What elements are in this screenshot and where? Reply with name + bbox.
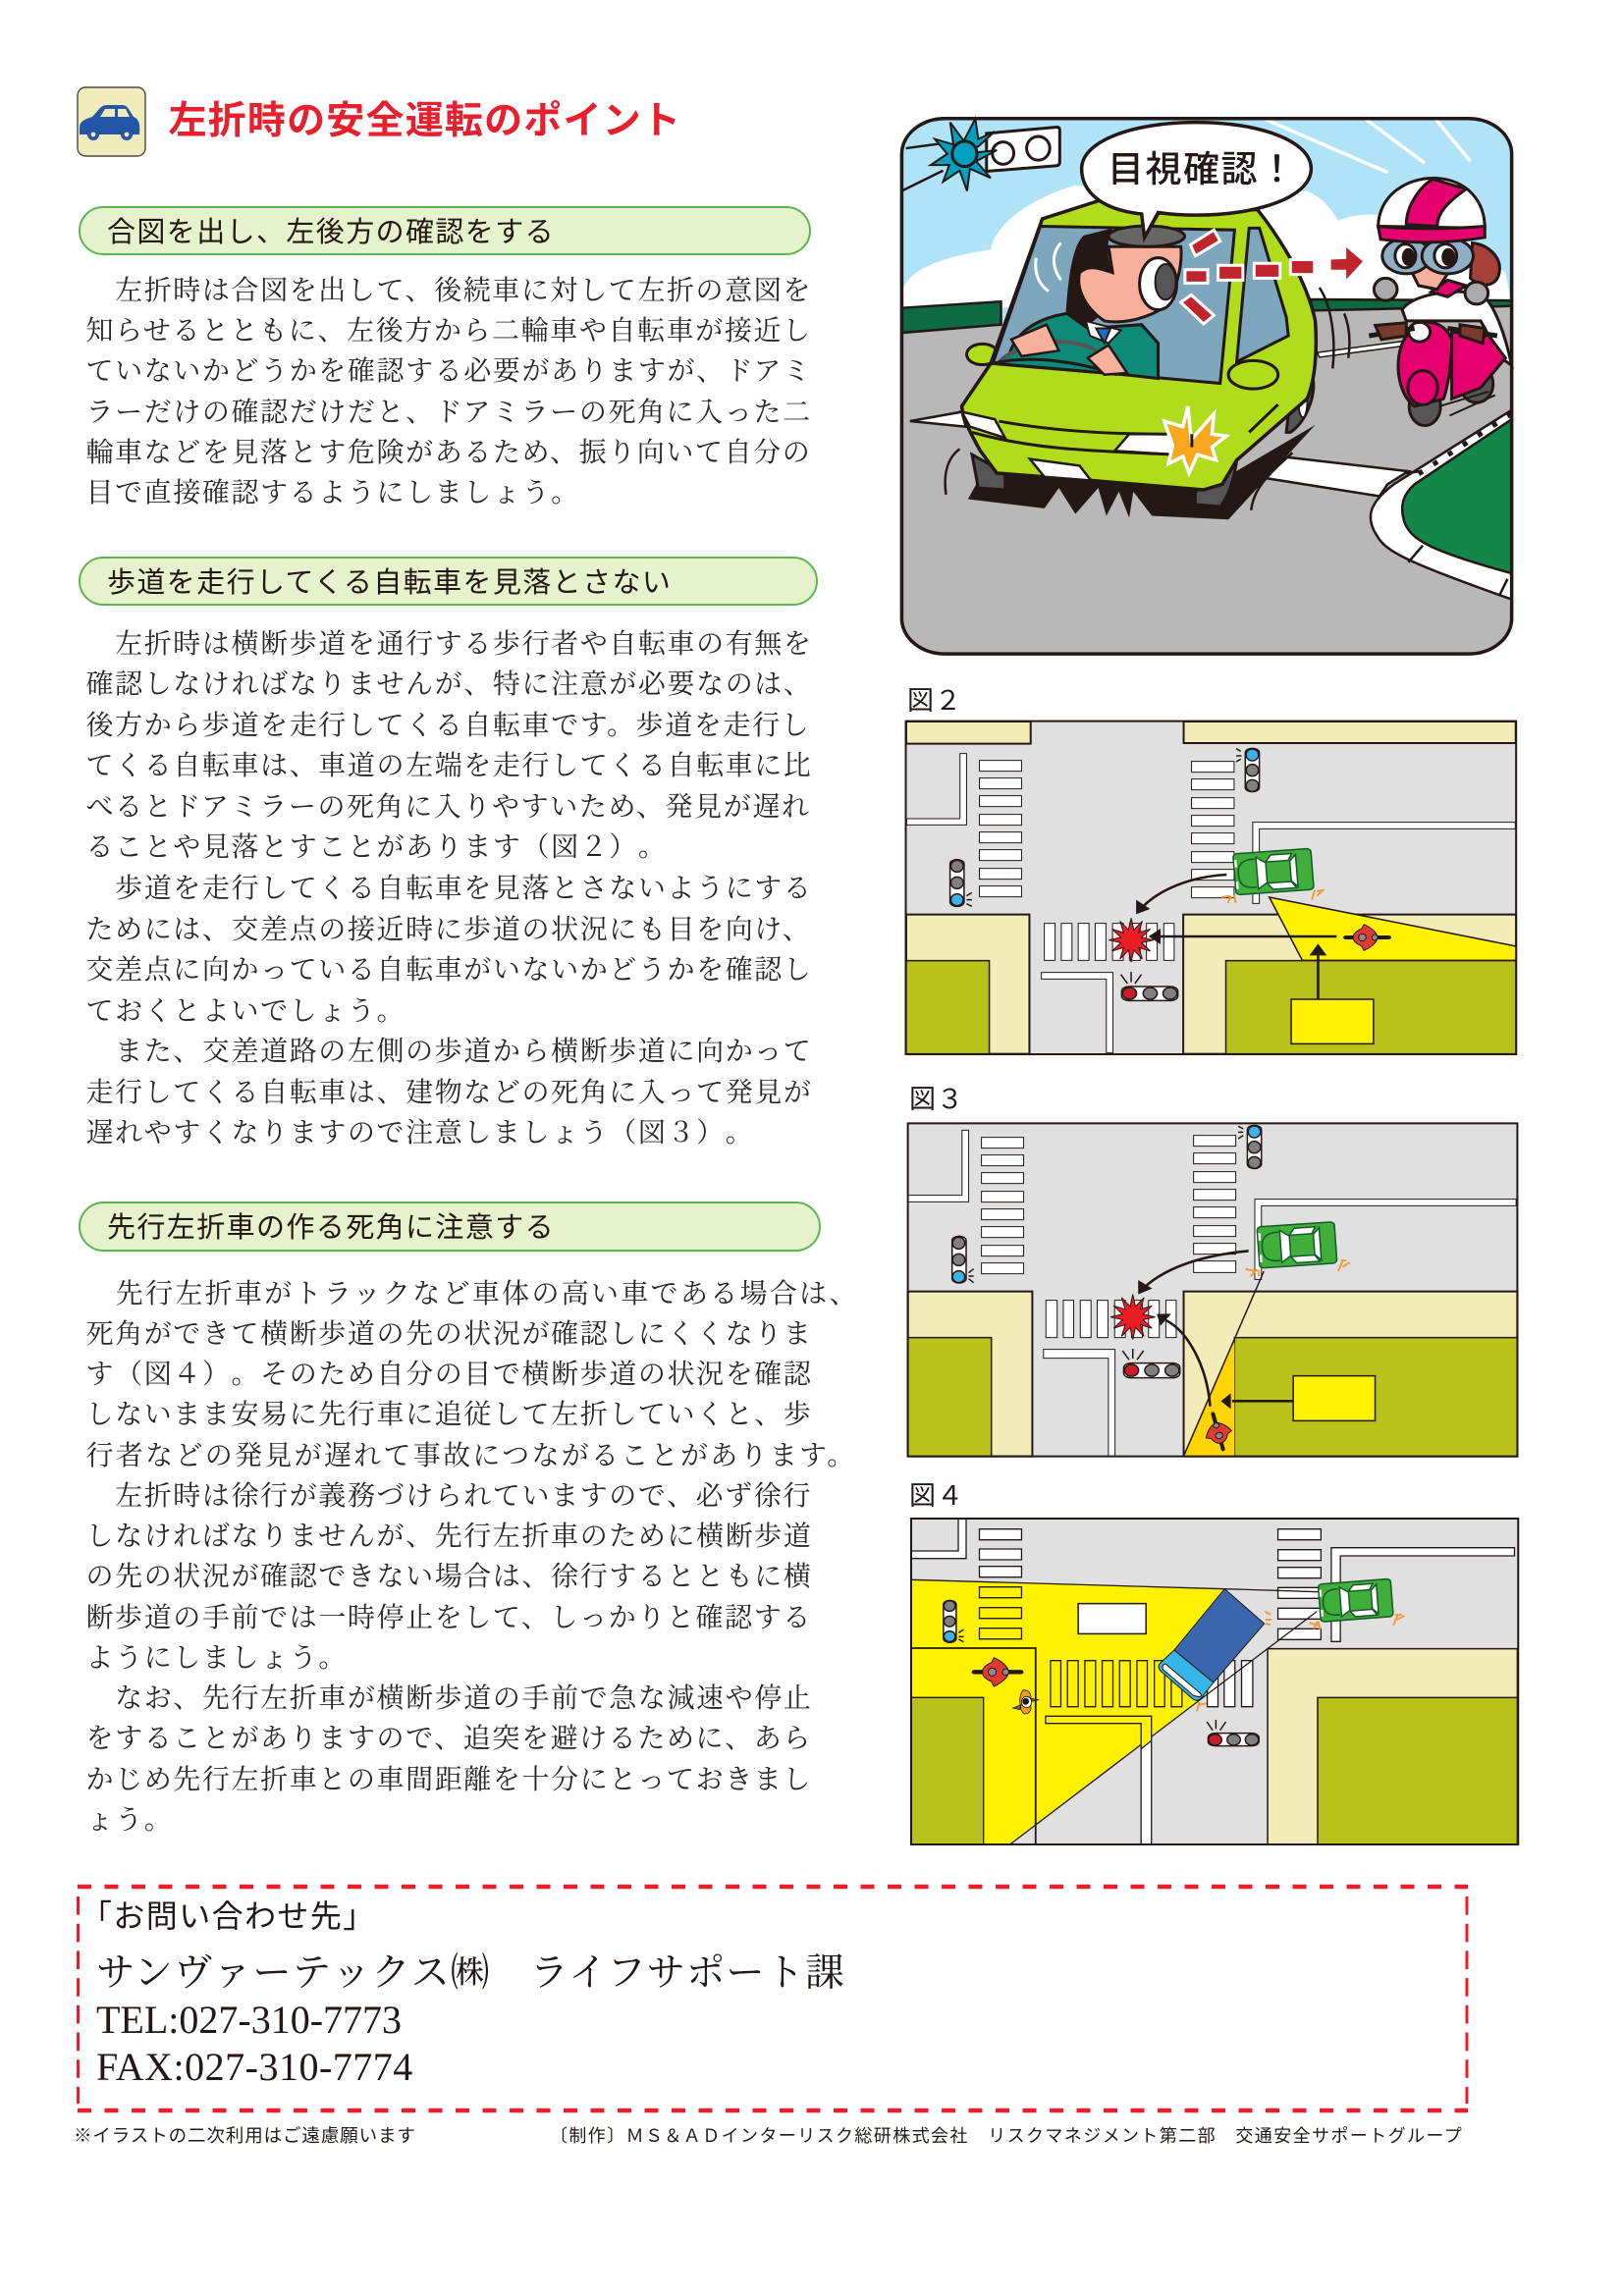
label: figure 2: 図２	[907, 686, 962, 716]
contact fax: FAX:027-310-7774	[96, 2045, 413, 2089]
car	[1233, 848, 1314, 895]
building	[1293, 1376, 1376, 1420]
text block: section 1	[86, 276, 812, 508]
heading: section 2	[79, 557, 818, 606]
text block: section 1: 知らせるとともに、左後方から二輪車や自転車が接近し	[86, 316, 812, 347]
text block: section 3: 先行左折車がトラックなど車体の高い車である場合は、	[116, 1278, 859, 1309]
diagram: figure 2	[905, 721, 1518, 1055]
left sidewalk outline	[911, 1648, 1036, 1844]
pedestrian	[1013, 1690, 1039, 1714]
diagram: figure 4	[910, 1518, 1520, 1845]
text block: section 2: ておくとよいでしょう。	[86, 996, 406, 1027]
car	[1257, 1222, 1337, 1268]
arrow: building sight block	[1220, 1393, 1293, 1409]
arrow: cyclist path	[1149, 929, 1336, 944]
bicycle	[1200, 1409, 1236, 1455]
icon: rider on pink scooter	[1369, 178, 1512, 426]
text block: section 3: の先の状況が確認できない場合は、徐行するとともに横	[86, 1562, 813, 1592]
text block: section 2: 遅れやすくなりますので注意しましょう（図３）。	[86, 1118, 754, 1148]
text block: section 2: 確認しなければなりませんが、特に注意が必要なのは、	[86, 669, 813, 700]
contact telephone: TEL:027-310-7773	[96, 1998, 402, 2042]
text block: section 1: 目で直接確認するようにしましょう。	[86, 478, 580, 508]
signals	[952, 1125, 1262, 1378]
text block: section 3	[86, 1278, 859, 1836]
building	[1291, 999, 1374, 1043]
text block: section 2: 歩道を走行してくる自転車を見落とさないようにする	[115, 874, 813, 904]
footnote left: ※イラストの二次利用はご遠慮願います	[74, 2125, 416, 2146]
footnote right: 〔制作〕ＭＳ＆ＡＤインターリスク総研株式会社 リスクマネジメント第二部 交通安全サポートグループ	[550, 2126, 1463, 2146]
text block: section 3: しないまま安易に先行車に追従して左折していくと、歩	[86, 1400, 813, 1430]
arrow: line of sight to motorcycle	[1181, 230, 1363, 324]
text block: section 2: 左折時は横断歩道を通行する歩行者や自転車の有無を	[115, 629, 813, 660]
bicycle	[1343, 925, 1391, 950]
text block: section 3: 左折時は徐行が義務づけられていますので、必ず徐行	[115, 1481, 812, 1512]
signals	[950, 748, 1260, 1000]
bicycle	[972, 1658, 1023, 1686]
text block: section 3: 断歩道の手前では一時停止をして、しっかりと確認する	[86, 1602, 812, 1633]
text block: section 3: 死角ができて横断歩道の先の状況が確認しにくくなりま	[86, 1319, 813, 1350]
text block: section 2: また、交差道路の左側の歩道から横断歩道に向かって	[115, 1037, 813, 1067]
blind spot area	[1184, 1271, 1264, 1456]
heading: section 1: 合図を出し、左後方の確認をする	[107, 217, 555, 248]
heading: section 1	[79, 206, 811, 255]
icon: green car with driver	[910, 200, 1350, 519]
label: figure 4: 図４	[909, 1481, 964, 1511]
heading: section 2: 歩道を走行してくる自転車を見落とさない	[107, 567, 672, 599]
collision burst	[1109, 918, 1154, 962]
text block: section 3: ようにしましょう。	[86, 1643, 348, 1674]
blind spot area	[911, 1579, 1319, 1844]
text block: section 3: をすることがありますので、追突を避けるために、あら	[86, 1724, 812, 1754]
arrow: building sight block	[1310, 943, 1326, 999]
text block: section 3: 行者などの発見が遅れて事故につながることがあります。	[86, 1441, 857, 1470]
speech text: 目視確認！	[1108, 149, 1296, 189]
text block: section 3: かじめ先行左折車との車間距離を十分にとっておきまし	[86, 1765, 812, 1794]
text block: section 2: 走行してくる自転車は、建物などの死角に入って発見が	[86, 1078, 813, 1108]
contact company: サンヴァーテックス㈱ ライフサポート課	[96, 1951, 844, 1995]
contact heading: 「お問い合わせ先」	[81, 1898, 376, 1934]
text block: section 2: てくる自転車は、車道の左端を走行してくる自転車に比	[86, 751, 813, 781]
truck	[1159, 1589, 1265, 1700]
arrow: car turn path	[1138, 1251, 1249, 1295]
text block: section 2: ためには、交差点の接近時に歩道の状況にも目を向け、	[86, 915, 811, 945]
heading: section 3	[79, 1201, 821, 1252]
text block: section 3: なお、先行左折車が横断歩道の手前で急な減速や停止	[115, 1683, 813, 1714]
illustration: driver checking for motorcycle	[899, 116, 1514, 656]
text block: section 2: 後方から歩道を走行してくる自転車です。歩道を走行し	[86, 711, 810, 741]
diagram: figure 3	[907, 1122, 1518, 1458]
text block: section 3: しなければなりませんが、先行左折車のために横断歩道	[86, 1522, 813, 1552]
speech bubble	[1082, 123, 1311, 238]
title: 左折時の安全運転のポイント	[169, 100, 681, 141]
text block: section 2: 交差点に向かっている自転車がいないかどうかを確認し	[86, 955, 813, 986]
collision burst	[1110, 1295, 1155, 1340]
label: figure 3: 図３	[909, 1085, 964, 1114]
text block: section 3: ょう。	[86, 1805, 173, 1836]
turn sparks	[1197, 1612, 1404, 1711]
text block: section 2: べるとドアミラーの死角に入りやすいため、発見が遅れ	[86, 792, 811, 823]
contact box border	[77, 1885, 1469, 2112]
arrow: cyclist path	[1157, 1313, 1210, 1407]
icon: blue car badge	[77, 86, 146, 157]
car	[1318, 1578, 1393, 1622]
text block: section 1: ラーだけの確認だけだと、ドアミラーの死角に入った二	[86, 398, 812, 428]
white building	[1078, 1604, 1146, 1633]
blind spot area	[1270, 897, 1516, 960]
text block: section 1: 左折時は合図を出して、後続車に対して左折の意図を	[115, 276, 812, 306]
illustration frame	[901, 119, 1512, 654]
text block: section 2	[86, 629, 813, 1148]
text block: section 1: 輪車などを見落とす危険があるため、振り向いて自分の	[86, 438, 811, 468]
icon: traffic signal	[901, 119, 1059, 191]
signals	[944, 1600, 1259, 1746]
arrow: car turn path	[1136, 875, 1226, 914]
heading: section 3: 先行左折車の作る死角に注意する	[107, 1212, 555, 1244]
text block: section 2: ることや見落とすことがあります（図２）。	[86, 832, 668, 863]
turn sparks	[1246, 1260, 1350, 1276]
turn sparks	[1221, 890, 1325, 903]
text block: section 3: す（図４）。そのため自分の目で横断歩道の状況を確認	[86, 1360, 813, 1390]
text block: section 1: ていないかどうかを確認する必要がありますが、ドアミ	[86, 356, 812, 387]
